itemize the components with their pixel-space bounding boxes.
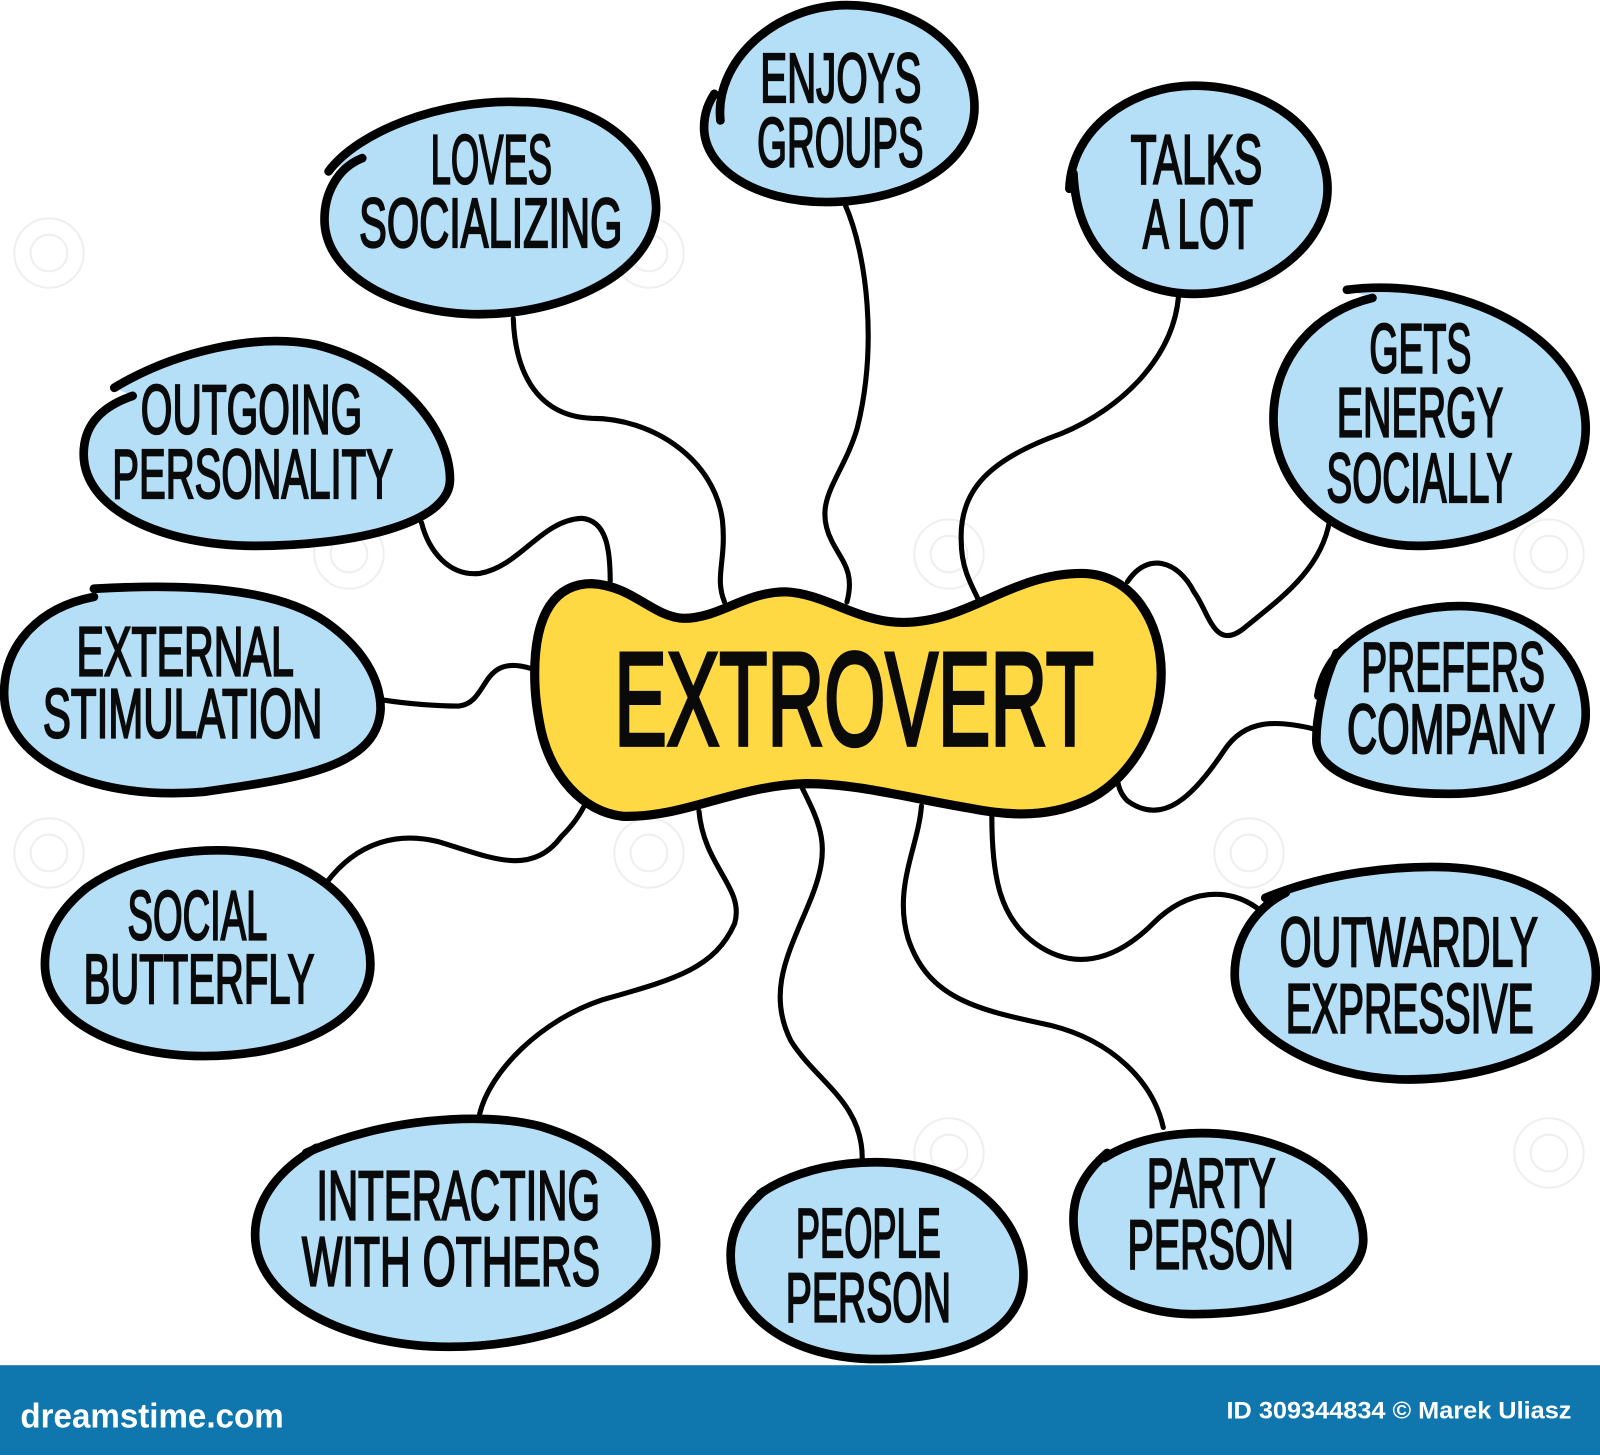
- bubble: talks a lot: TALKS: [1131, 121, 1262, 199]
- bubble: outwardly expressive: [1235, 867, 1596, 1080]
- bubble: social butterfly: BUTTERFLY: [84, 940, 314, 1018]
- bubble: talks a lot: [1069, 86, 1328, 294]
- bubble: enjoys groups: GROUPS: [757, 103, 923, 181]
- bubble: gets energy socially: [1273, 288, 1586, 546]
- central node: extrovert: [535, 573, 1161, 816]
- bubble: interacting with others: WITH OTHERS: [302, 1223, 600, 1301]
- bubble: enjoys groups: [704, 5, 974, 202]
- bubble: gets energy socially: GETS: [1369, 309, 1471, 387]
- bubble: prefers company: [1316, 606, 1586, 794]
- bubble: loves socializing: SOCIALIZING: [359, 184, 622, 262]
- footer logo text: dreamstime.com: [20, 1397, 284, 1435]
- bubble: outgoing personality: PERSONALITY: [112, 435, 393, 513]
- bubble: external stimulation: STIMULATION: [43, 675, 322, 753]
- bubble: party person: PARTY: [1147, 1144, 1276, 1222]
- bubble: external stimulation: EXTERNAL: [77, 612, 294, 690]
- bubble: people person: [731, 1162, 1023, 1359]
- bubble: social butterfly: SOCIAL: [128, 877, 267, 955]
- bubble: party person: PERSON: [1128, 1205, 1294, 1283]
- bubble: interacting with others: [255, 1119, 656, 1347]
- bubble: external stimulation: [4, 587, 381, 793]
- bubble: people person: PERSON: [786, 1258, 951, 1336]
- bubble: loves socializing: LOVES: [431, 121, 552, 199]
- bubble: party person: [1073, 1133, 1363, 1314]
- bubble: outgoing personality: [84, 341, 450, 546]
- footer bar: [0, 1365, 1600, 1455]
- bubble: talks a lot: A LOT: [1143, 185, 1253, 263]
- title: extrovert: EXTROVERT: [614, 626, 1094, 774]
- bubble: people person: PEOPLE: [796, 1194, 941, 1272]
- bubble: outgoing personality: OUTGOING: [141, 371, 362, 449]
- bubble: social butterfly: [45, 850, 370, 1056]
- bubble: interacting with others: INTERACTING: [316, 1156, 600, 1234]
- bubble: loves socializing: [324, 102, 656, 314]
- footer credit: ID 309344834 © Marek Uliasz: [1227, 1397, 1571, 1424]
- bubble: enjoys groups: ENJOYS: [760, 39, 921, 117]
- connectors from the centre to each bubble: [327, 204, 1330, 1158]
